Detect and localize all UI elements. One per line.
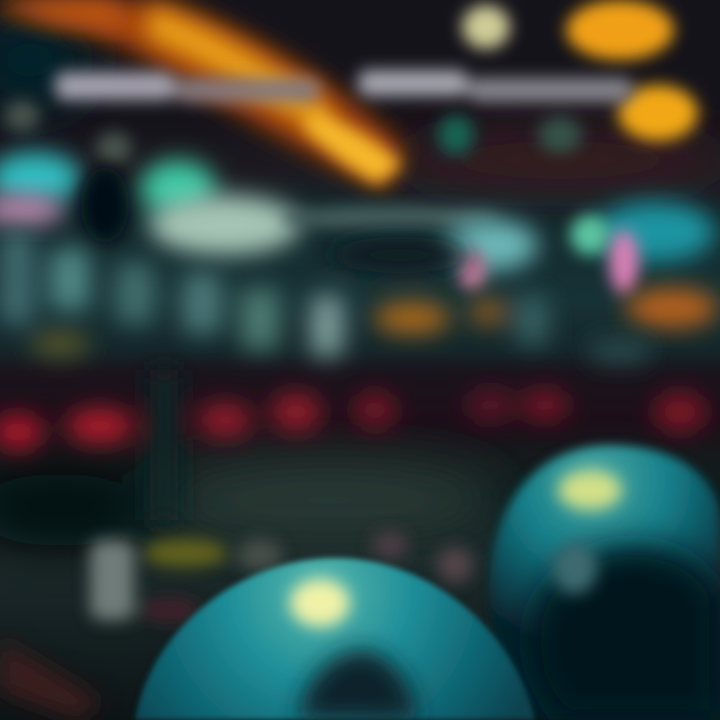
teal and pink panels <box>0 152 718 328</box>
red band lights <box>0 370 706 520</box>
swoosh: orange and yellow streak <box>0 0 405 190</box>
lower floor details <box>0 531 473 720</box>
background glows <box>0 10 720 546</box>
sphere: centre teal ball <box>135 558 535 720</box>
blurred heading text <box>55 70 633 102</box>
row of teal columns <box>0 230 650 362</box>
sphere: right teal ball <box>490 445 720 720</box>
top right lights <box>4 0 698 164</box>
